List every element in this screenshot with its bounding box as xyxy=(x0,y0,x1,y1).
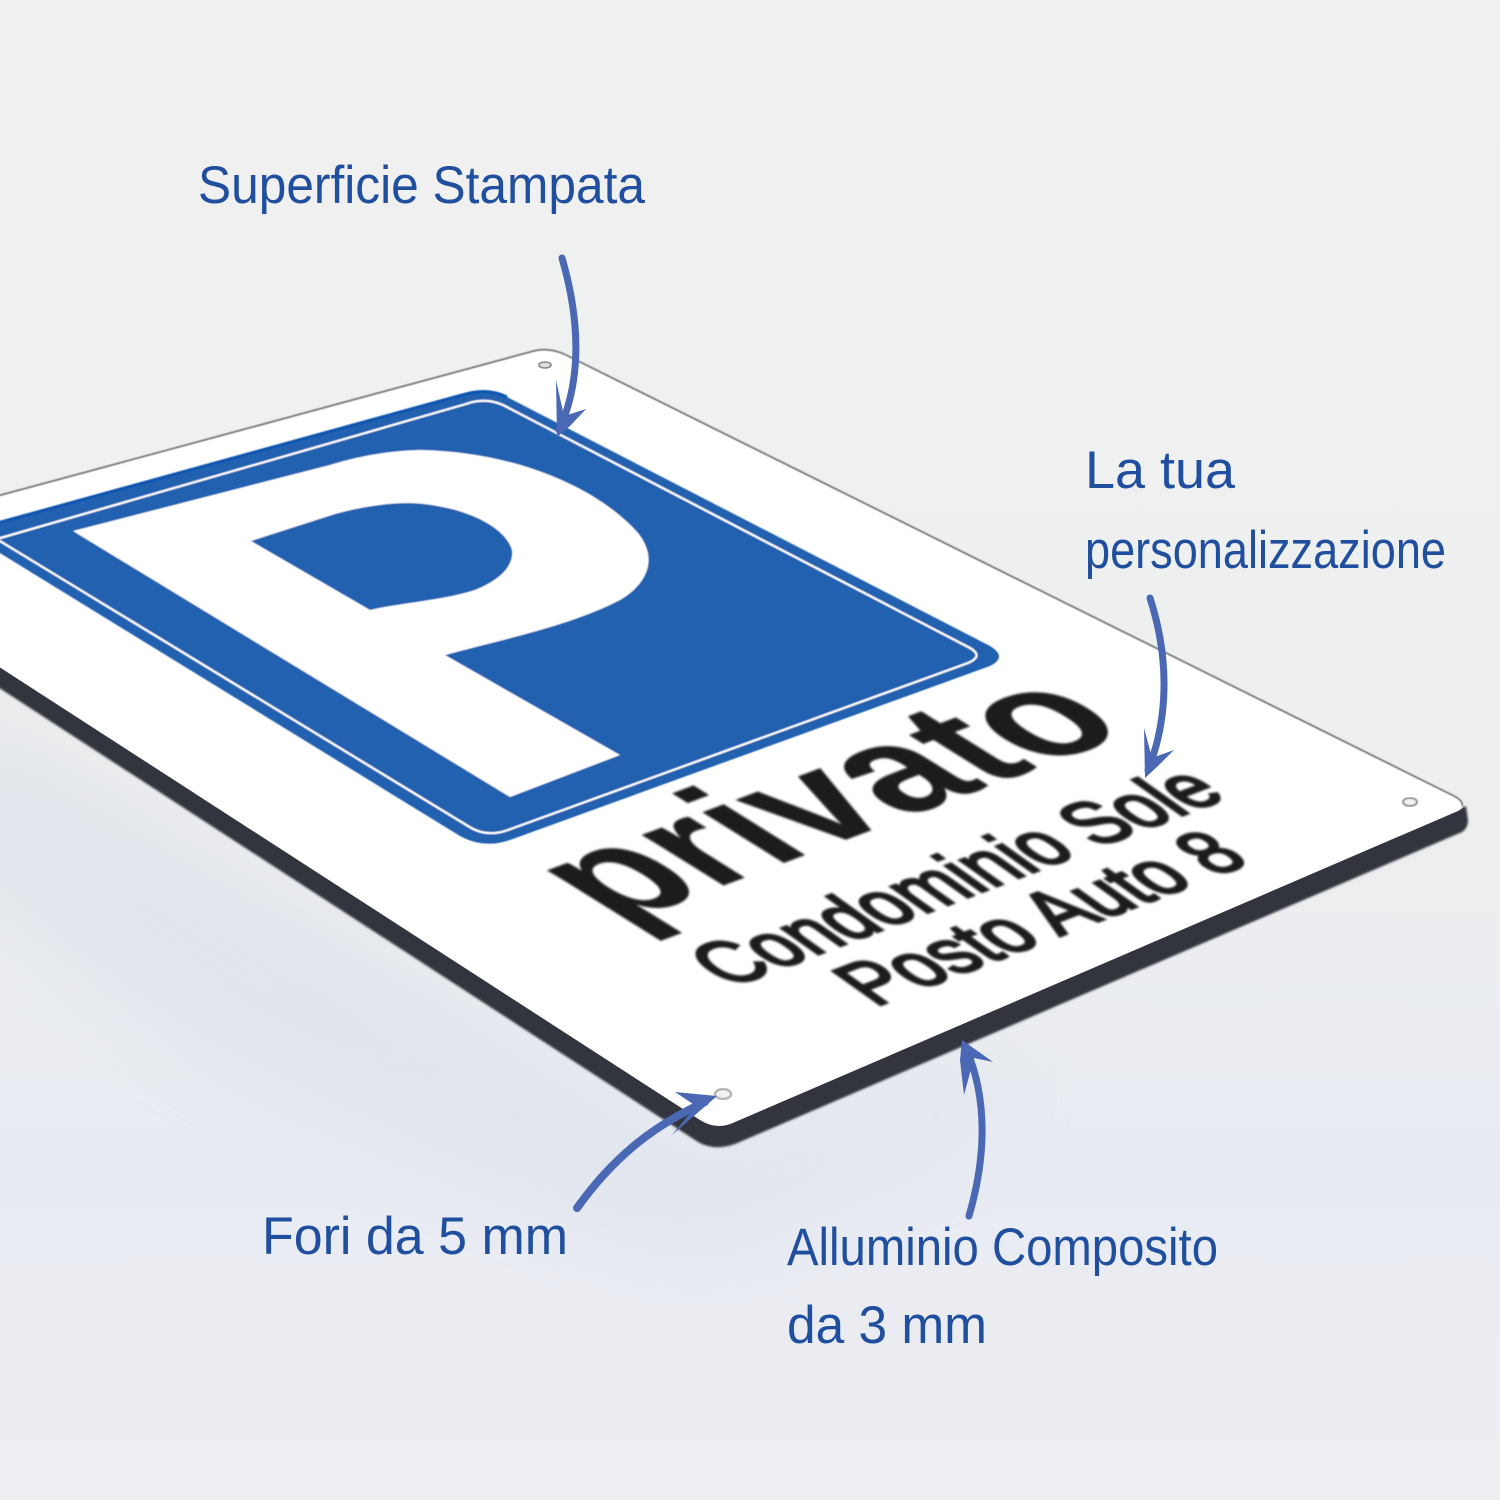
hole: right corner xyxy=(1403,798,1417,806)
callout: La tua personalizzazione xyxy=(1085,441,1446,580)
plate printed surface xyxy=(0,350,1463,1126)
plate top edge line xyxy=(0,350,1462,806)
sign line: Condominio Sole: Condominio Sole xyxy=(669,754,1244,999)
plate shadow xyxy=(0,690,1000,1240)
white letter P xyxy=(73,450,649,797)
arrow: to printed surface xyxy=(556,258,586,437)
plate edge thickness xyxy=(0,660,1468,1147)
sign line: Posto Auto 8: Posto Auto 8 xyxy=(812,818,1267,1018)
callout line: personalizzazione: personalizzazione xyxy=(1085,521,1446,580)
parking symbol panel xyxy=(0,391,999,844)
blue panel xyxy=(0,391,999,844)
panel darker rim xyxy=(0,391,507,525)
panel inner white line xyxy=(0,401,977,833)
plate: aluminium composite sign xyxy=(0,350,1468,1147)
hole: bottom corner xyxy=(715,1089,731,1099)
callout line: La tua: La tua xyxy=(1085,441,1236,500)
callout: Superficie Stampata: Superficie Stampata xyxy=(198,156,645,215)
sign text xyxy=(479,645,1267,1018)
callout line: Alluminio Composito: Alluminio Composito xyxy=(787,1218,1218,1277)
arrow: to hole xyxy=(577,1092,717,1208)
callout: Alluminio Composito da 3 mm xyxy=(787,1218,1218,1355)
callout line: da 3 mm: da 3 mm xyxy=(787,1296,987,1355)
hole: top corner xyxy=(539,362,551,368)
arrow: to personalised text xyxy=(1144,598,1174,778)
sign word: privato: privato xyxy=(479,645,1168,945)
callout: Fori da 5 mm: Fori da 5 mm xyxy=(262,1207,568,1266)
arrow: to plate edge xyxy=(960,1040,993,1216)
